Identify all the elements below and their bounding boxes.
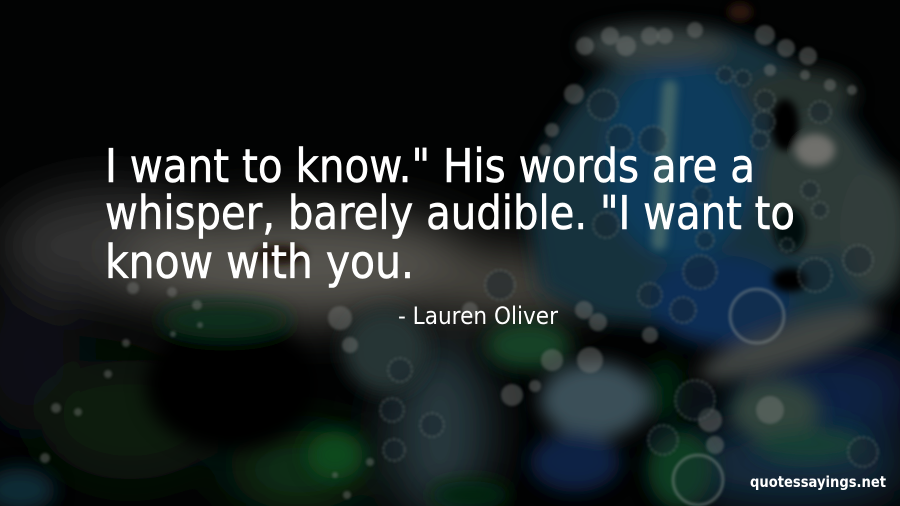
author attribution: - Lauren Oliver <box>398 302 558 330</box>
blue dome <box>525 28 895 330</box>
quote text: know with you. <box>105 235 414 289</box>
quote text: I want to know." His words are a <box>105 139 755 193</box>
quote text: whisper, barely audible. "I want to <box>105 186 795 240</box>
